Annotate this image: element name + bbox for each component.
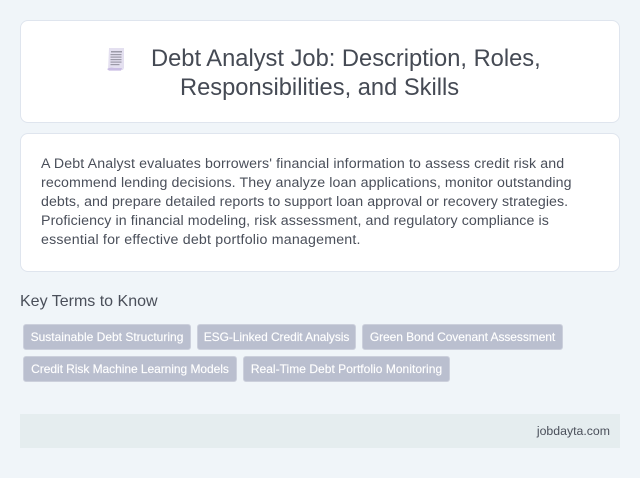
description text	[41, 156, 572, 248]
tag	[243, 356, 450, 382]
tag	[23, 356, 237, 382]
footer bar	[20, 414, 620, 448]
tag	[23, 324, 191, 350]
tag: Sustainable Debt Structuring	[31, 330, 183, 344]
tag: Green Bond Covenant Assessment	[370, 330, 555, 344]
description text: recommend lending decisions. They analyze loan applications, monitor outstanding	[41, 175, 572, 191]
description text: essential for effective debt portfolio management.	[41, 232, 361, 248]
title line 2: Responsibilities, and Skills	[180, 75, 459, 101]
panel: title card	[20, 20, 620, 123]
icon: document ledger	[107, 48, 124, 71]
description text: A Debt Analyst evaluates borrowers' financial information to assess credit risk and	[41, 156, 564, 172]
tag: Real-Time Debt Portfolio Monitoring	[251, 362, 442, 376]
tag list	[23, 324, 563, 382]
heading: key terms: Key Terms to Know	[20, 293, 158, 310]
tag	[362, 324, 563, 350]
title line 1: Debt Analyst Job: Description, Roles,	[151, 46, 541, 72]
description text: Proficiency in financial modeling, risk assessment, and regulatory compliance is	[41, 213, 549, 229]
panel: description	[20, 133, 620, 272]
footer source text: jobdayta.com	[537, 424, 610, 438]
tag	[197, 324, 356, 350]
description text: debts, and prepare detailed reports to support loan approval or recovery strategies.	[41, 194, 568, 210]
tag: Credit Risk Machine Learning Models	[31, 362, 229, 376]
tag: ESG-Linked Credit Analysis	[204, 330, 349, 344]
